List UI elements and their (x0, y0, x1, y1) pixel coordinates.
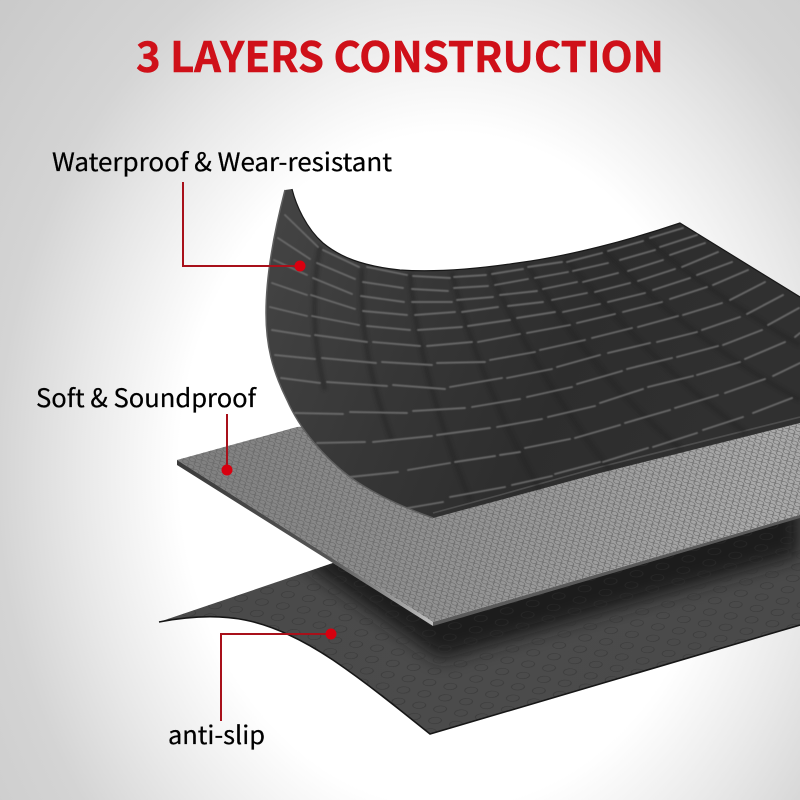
panel: top waterproof mat (266, 189, 800, 518)
callout: anti-slip (168, 628, 336, 752)
callout: Waterproof & Wear-resistant: Waterproof & Wear-resistant (52, 143, 393, 179)
panel: middle soft layer (177, 400, 800, 626)
panel: bottom anti-slip layer (159, 500, 800, 734)
callout: anti-slip: anti-slip (168, 716, 265, 752)
title: 3 LAYERS CONSTRUCTION (136, 24, 664, 85)
callout: Waterproof & Wear-resistant (52, 143, 393, 272)
mat grout columns (315, 237, 800, 500)
callout: Soft & Soundproof: Soft & Soundproof (36, 379, 257, 415)
callout: Soft & Soundproof (36, 379, 257, 476)
mat tile highlights (270, 215, 800, 508)
